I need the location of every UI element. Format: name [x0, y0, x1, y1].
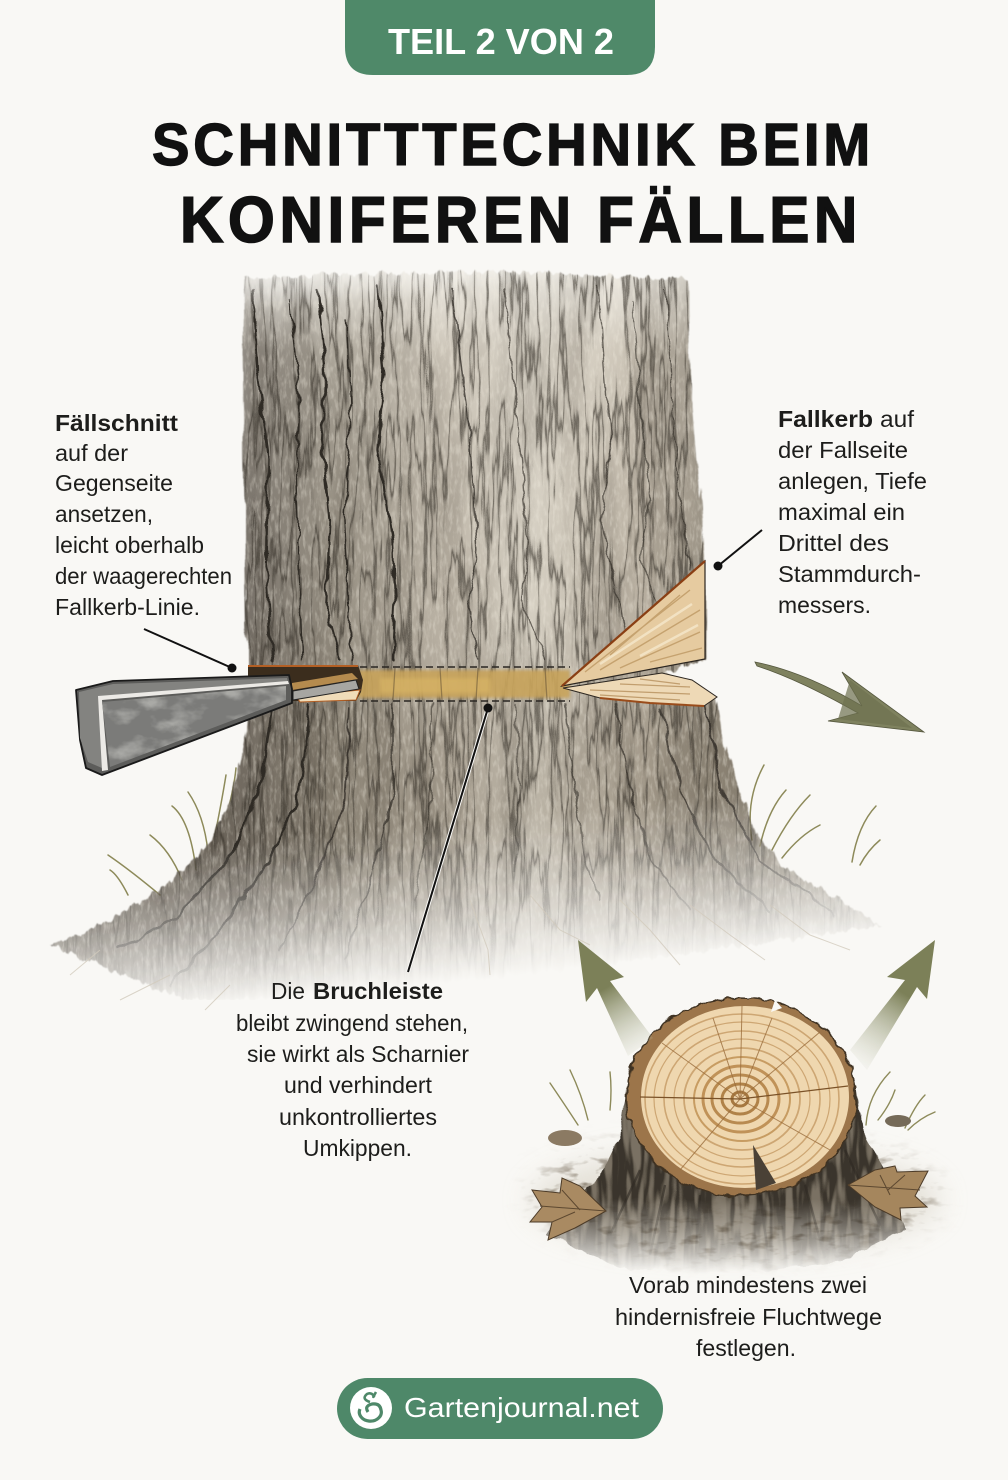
- leader: Fallkerb: [714, 530, 762, 570]
- text: Bruchleiste: und verhindert: [284, 1072, 433, 1098]
- text: Fällschnitt: Gegenseite: [55, 470, 173, 496]
- text: Fallkerb: Fallkerb: [778, 406, 873, 432]
- falling direction arrow: [755, 662, 924, 732]
- leader: Bruchleiste: [408, 704, 492, 972]
- text: Fluchtwege: hindernisfreie Fluchtwege: [615, 1304, 882, 1330]
- footer: Gartenjournal.net: Gartenjournal.net: [404, 1392, 639, 1423]
- text: Fallkerb: [778, 406, 927, 618]
- felling wedge: [70, 670, 359, 780]
- icon: logo: [350, 1387, 392, 1429]
- text: Bruchleiste: sie wirkt als Scharnier: [247, 1041, 469, 1067]
- text: Fallkerb: anlegen, Tiefe: [778, 468, 927, 494]
- stump cut face: [626, 998, 856, 1196]
- grass right: [750, 765, 880, 865]
- text: Fluchtwege: Vorab mindestens zwei: [629, 1272, 867, 1298]
- footer: Gartenjournal.net: [337, 1378, 663, 1439]
- text: Fällschnitt: Fällschnitt: [55, 410, 178, 436]
- grass left: [108, 768, 236, 895]
- text: Fallkerb: Drittel des: [778, 530, 889, 556]
- text: Fallkerb: Stammdurch-: [778, 561, 921, 587]
- text: Fällschnitt: auf der: [55, 440, 128, 466]
- arrow: right flight route: [850, 940, 935, 1070]
- text: Fällschnitt: leicht oberhalb: [55, 532, 204, 558]
- title: [152, 112, 874, 256]
- back cut notch: [248, 665, 363, 702]
- holding wood band: Bruchleiste: [358, 667, 570, 701]
- text: Bruchleiste: [236, 978, 469, 1161]
- notch: lower wedge: [563, 673, 717, 706]
- leaf left: [530, 1178, 606, 1240]
- text: Fallkerb: messers.: [778, 592, 871, 618]
- stump ground: [520, 1069, 949, 1272]
- stump body: [546, 1090, 906, 1272]
- leaf right: [848, 1166, 928, 1220]
- bark fissures: [120, 285, 835, 985]
- leader: Fällschnitt: [144, 629, 236, 672]
- text: Fallkerb: maximal ein: [778, 499, 905, 525]
- arrow: left flight route: [578, 940, 653, 1056]
- text: Fällschnitt: [55, 410, 232, 620]
- badge: Teil 2 von 2: [345, 0, 655, 75]
- trunk: [40, 260, 900, 1000]
- text: Bruchleiste: Umkippen.: [303, 1135, 412, 1161]
- pale root filaments: [70, 895, 850, 1010]
- badge: Teil 2 von 2: TEIL 2 VON 2: [388, 21, 614, 62]
- title: SCHNITTTECHNIK BEIM: [152, 112, 874, 178]
- text: Fluchtwege: festlegen.: [696, 1335, 796, 1361]
- text: Fällschnitt: der waagerechten: [55, 563, 232, 589]
- falling notch: [562, 561, 717, 706]
- text: Fällschnitt: Fallkerb-Linie.: [55, 594, 200, 620]
- text: Bruchleiste: bleibt zwingend stehen,: [236, 1010, 468, 1036]
- text: Bruchleiste: Bruchleiste: [313, 978, 443, 1004]
- text: Fallkerb: auf: [880, 406, 915, 432]
- flight route arrows: [578, 940, 935, 1070]
- text: Fällschnitt: ansetzen,: [55, 501, 153, 527]
- title: KONIFEREN FÄLLEN: [180, 183, 862, 256]
- text: Fluchtwege: [615, 1272, 882, 1361]
- notch: upper wedge: [562, 561, 705, 686]
- text: Bruchleiste: unkontrolliertes: [279, 1104, 437, 1130]
- text: Fallkerb: der Fallseite: [778, 437, 908, 463]
- text: Bruchleiste: Die: [271, 978, 305, 1004]
